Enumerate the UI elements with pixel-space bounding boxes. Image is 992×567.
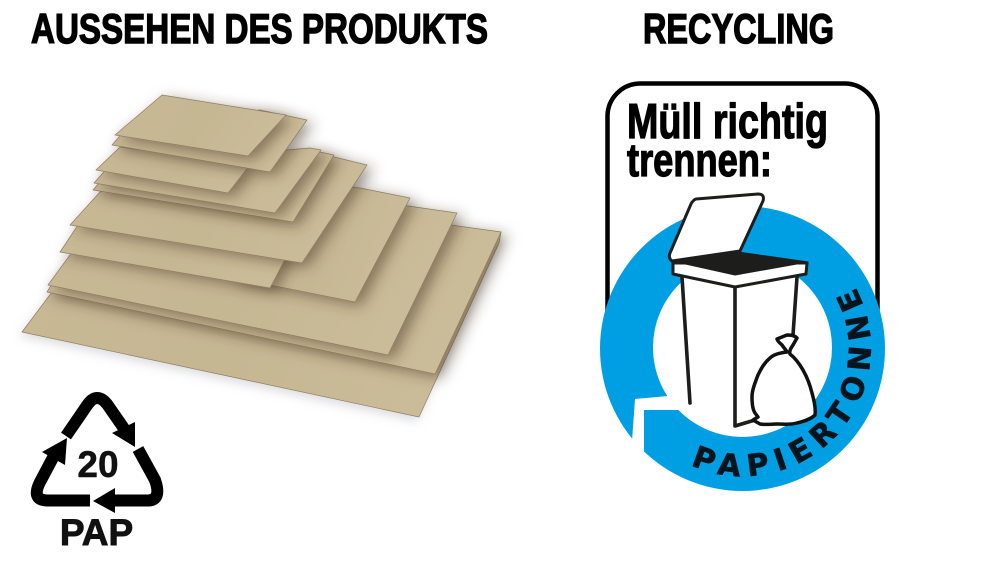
open lid <box>669 194 763 261</box>
code number: 20 <box>77 444 119 485</box>
sheet: seventh <box>93 152 334 222</box>
icon: recycling code 20 PAP <box>37 398 157 553</box>
sign frame <box>607 84 878 325</box>
icon: waste bin <box>669 194 808 426</box>
bin opening <box>672 252 808 275</box>
heading: Recycling: RECYCLING <box>643 5 834 52</box>
recycling triangle arrows <box>37 398 157 513</box>
sheet: bottom largest <box>22 200 501 417</box>
heading: Aussehen des Produkts: AUSSEHEN DES PRODUKTS <box>31 5 488 52</box>
bin body <box>682 277 797 426</box>
icon: tied rubbish bag <box>752 335 815 424</box>
sheet: tenth <box>112 110 307 172</box>
panel: Papiertonne recycling sign <box>600 81 885 491</box>
blue circular arrow ring <box>600 206 885 491</box>
bin edges <box>682 277 797 426</box>
sign heading line one: Müll richtig <box>627 95 828 149</box>
sign heading line two: trennen: <box>627 134 772 186</box>
curved label: Papiertonne: PAPIERTONNE <box>692 288 872 477</box>
sheet: third <box>48 180 457 355</box>
sheet: ninth <box>96 147 250 193</box>
sheet: sixth <box>70 156 367 263</box>
bin rim <box>673 263 807 287</box>
material label: PAP <box>60 512 133 553</box>
sheet: second largest <box>47 190 501 374</box>
product photo: stacked corrugated cardboard sheets <box>22 95 501 417</box>
sheet: top smallest <box>115 95 286 156</box>
sheet: eighth <box>94 148 321 213</box>
sheet: fourth <box>235 180 410 302</box>
sheet: fifth left <box>60 222 290 288</box>
